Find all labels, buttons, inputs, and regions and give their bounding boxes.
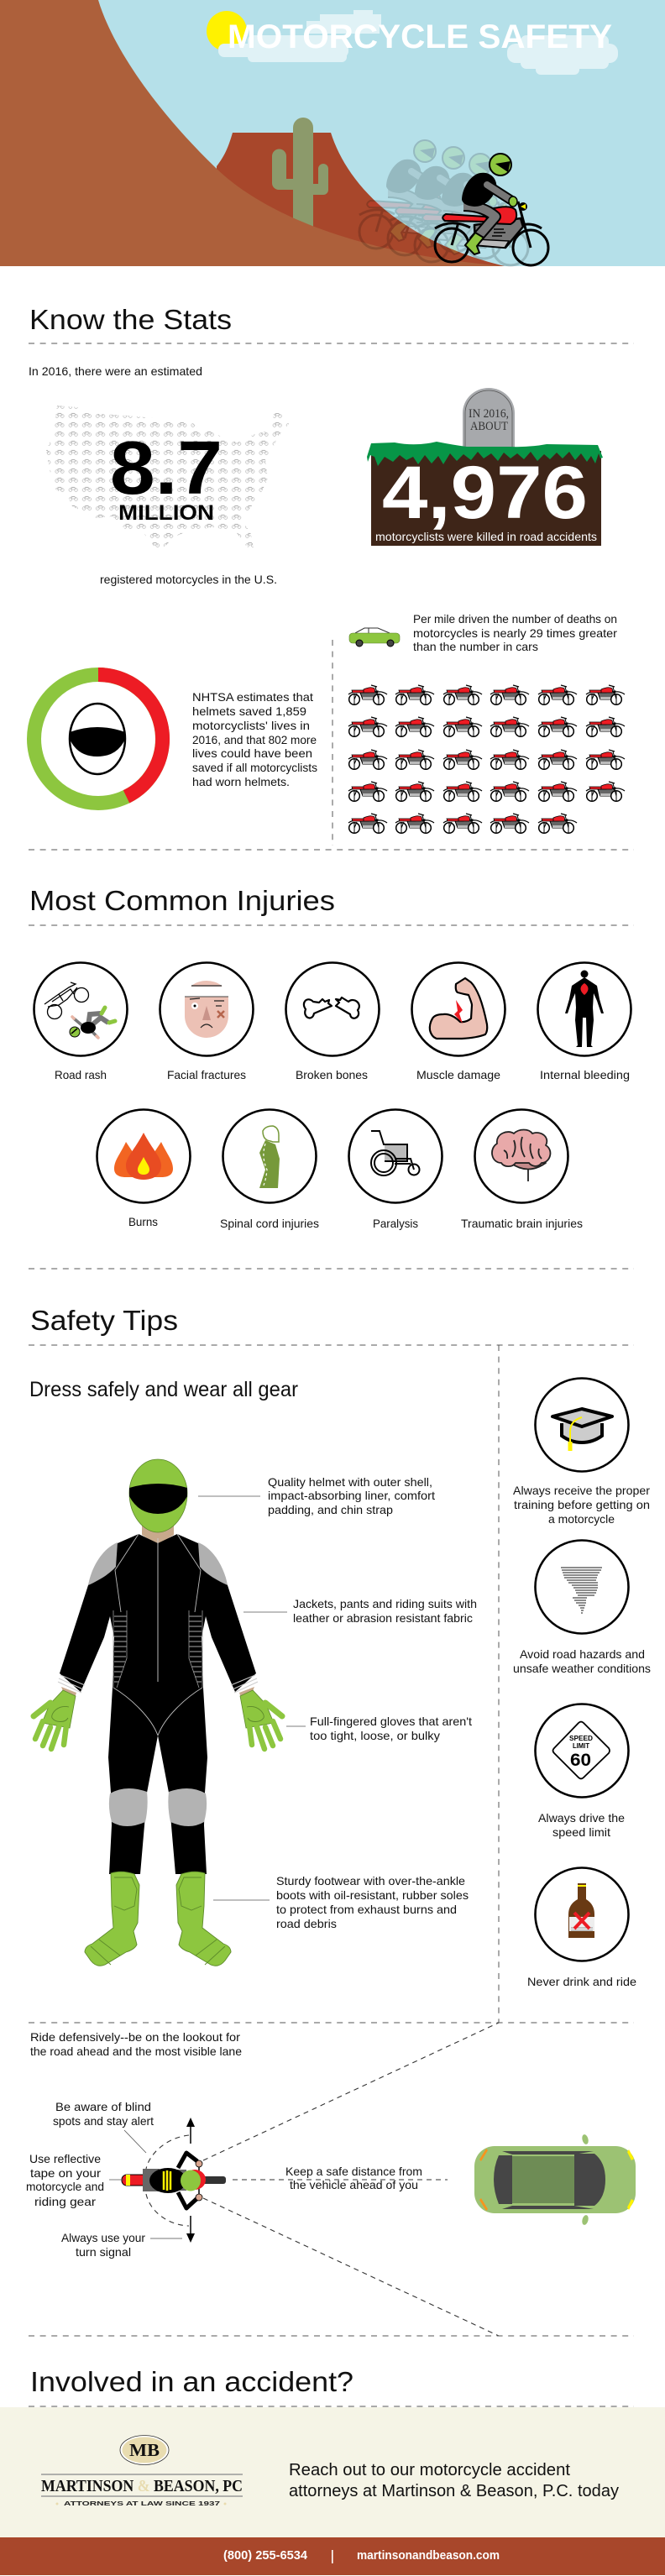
tombstone: IN 2016, (469, 407, 509, 421)
heading: know the stats: Know the Stats (29, 304, 232, 335)
injury: muscle damage (411, 962, 505, 1081)
title: MOTORCYCLE SAFETY (228, 18, 612, 55)
injury: traumatic brain: Traumatic brain injuries (461, 1217, 583, 1230)
icon: speed sign (552, 1721, 610, 1778)
icon: crashed bike (45, 982, 89, 1019)
text: per mile: Per mile driven the number of deaths on (413, 612, 617, 626)
clouds (218, 10, 618, 75)
callout: footwear: road debris (276, 1917, 337, 1930)
tip: road hazards (513, 1540, 651, 1675)
tombstone (463, 388, 515, 449)
injury: facial fractures: Facial fractures (167, 1068, 246, 1081)
icon: speed sign: SPEED (569, 1735, 593, 1742)
icon: body with heart (565, 971, 604, 1047)
callout: safe distance: the vehicle ahead of you (290, 2178, 418, 2191)
caption: registered motorcycles in the U.S. (100, 573, 277, 586)
tip: speed limit: Always drive the (538, 1811, 625, 1825)
text: reach out: attorneys at Martinson & Beason, P.C. today (289, 2482, 619, 2500)
icon: rider from above (122, 2152, 226, 2209)
callout: helmet: impact-absorbing liner, comfort (268, 1489, 435, 1502)
number: 4,976 (382, 450, 588, 534)
injury: broken bones (285, 962, 380, 1081)
panel: law firm contact (0, 2407, 665, 2537)
motorcycle and rider (435, 154, 548, 265)
footer bar (0, 2537, 665, 2575)
tombstone: ABOUT (470, 420, 508, 433)
callout: blind spots: spots and stay alert (53, 2114, 154, 2128)
ghost riders (359, 140, 528, 265)
callout: gloves: Full-fingered gloves that aren't (310, 1715, 472, 1728)
callout: footwear: to protect from exhaust burns and (276, 1903, 457, 1916)
suit, gloves, boots (34, 1534, 282, 1966)
cactus (272, 118, 328, 243)
footer bar: (800) 255-6534 (223, 2548, 308, 2563)
sky (0, 0, 665, 266)
subheading: dress safely: Dress safely and wear all gear (29, 1378, 298, 1401)
icon: broken bone (304, 997, 359, 1018)
icon: wheelchair (371, 1131, 420, 1175)
icon: green car (349, 628, 400, 647)
tip: speed limit (536, 1704, 628, 1839)
stat: us map 8.7 million (46, 406, 289, 586)
tip: speed limit: speed limit (552, 1825, 610, 1839)
text: nhtsa estimate: helmets saved 1,859 (192, 704, 306, 718)
icon: flames (114, 1133, 173, 1180)
icon: graduation cap (552, 1409, 612, 1451)
icon: lightning (454, 1000, 463, 1024)
stat: tombstone 4,976 killed (367, 388, 603, 546)
callout: reflective tape: tape on your (30, 2166, 101, 2180)
tip: training: Always receive the proper (513, 1484, 650, 1497)
injury: broken bones: Broken bones (296, 1068, 368, 1081)
text: reach out (289, 2461, 619, 2500)
caption: motorcyclists were killed in road accidents (375, 530, 597, 543)
icon: crossed bottle (568, 1883, 594, 1938)
callout: helmet (198, 1475, 435, 1516)
logo: ATTORNEYS AT LAW SINCE 1937 (64, 2501, 220, 2507)
callout: turn signal: turn signal (76, 2245, 131, 2259)
injury: paralysis: Paralysis (373, 1217, 418, 1230)
icon: spine figure (259, 1126, 280, 1188)
icon: speed sign: LIMIT (573, 1742, 589, 1750)
text: nhtsa estimate: NHTSA estimates that (192, 690, 313, 704)
logo: MARTINSON & BEASON, PC (41, 2477, 243, 2495)
injury: burns (97, 1110, 190, 1228)
text: nhtsa estimate: 2016, and that 802 more (192, 733, 317, 746)
tip: road hazards: unsafe weather conditions (513, 1662, 651, 1675)
mesa (217, 133, 505, 266)
icon: bandaged face (185, 981, 228, 1038)
injury: spinal cord (220, 1110, 319, 1230)
icon: brain (492, 1130, 550, 1181)
callout: helmet: padding, and chin strap (268, 1503, 393, 1516)
map of motorcycles (46, 406, 289, 552)
tip: never drink: Never drink and ride (527, 1975, 636, 1988)
injury: road rash: Road rash (55, 1068, 107, 1081)
vertical divider (498, 1345, 500, 2023)
callout: footwear (213, 1874, 469, 1930)
text: ride defensively (30, 2030, 242, 2058)
text: ride defensively: the road ahead and the most visible lane (30, 2045, 242, 2058)
footer bar: martinsonandbeason.com (357, 2548, 500, 2563)
callout: blind spots (53, 2100, 154, 2153)
callout: reflective tape: Use reflective (29, 2152, 101, 2165)
callout: turn signal: Always use your (61, 2231, 145, 2244)
callout: footwear: boots with oil-resistant, rubber soles (276, 1888, 469, 1902)
injury: muscle damage: Muscle damage (416, 1068, 500, 1081)
pictogram: 29 motorcycles (348, 685, 625, 833)
soil (371, 451, 601, 546)
vertical divider (332, 640, 333, 846)
icon: tornado (561, 1568, 602, 1613)
icon: fallen rider (70, 1008, 115, 1038)
heading: most common injuries: Most Common Injuries (29, 885, 335, 916)
icon: car from above (474, 2134, 636, 2226)
injury: internal bleeding (537, 962, 631, 1081)
number: 8.7 (110, 427, 223, 510)
callout: jackets: Jackets, pants and riding suits with (293, 1597, 477, 1610)
injury: paralysis (349, 1110, 442, 1230)
callout: blind spots: Be aware of blind (55, 2100, 151, 2113)
text: estimated intro: In 2016, there were an estimated (29, 364, 202, 378)
logo (41, 2435, 243, 2507)
helmet (129, 1459, 187, 1532)
text: nhtsa estimate (192, 690, 317, 788)
callout: reflective tape (26, 2152, 124, 2208)
text: per mile: motorcycles is nearly 29 times greater (413, 626, 617, 640)
icon: speed sign: 60 (570, 1751, 591, 1770)
tip: never drink (527, 1867, 636, 1988)
callout: jackets (243, 1597, 477, 1625)
injury: burns: Burns (128, 1215, 158, 1228)
neck (142, 1524, 174, 1545)
text: nhtsa estimate: lives could have been (192, 746, 312, 760)
callout: helmet: Quality helmet with outer shell, (268, 1475, 432, 1489)
callout: turn signal (61, 2231, 182, 2259)
logo: MB (129, 2440, 160, 2460)
hill (0, 0, 505, 266)
injury: internal bleeding: Internal bleeding (540, 1068, 630, 1081)
tip: road hazards: Avoid road hazards and (520, 1647, 645, 1661)
unit: MILLION (118, 501, 214, 525)
callout: gloves (286, 1715, 472, 1742)
injury: road rash (34, 962, 128, 1081)
tip: training: training before getting on (514, 1498, 650, 1511)
icon: flexed arm (430, 978, 487, 1039)
text: per mile: than the number in cars (413, 640, 538, 653)
callout: footwear: Sturdy footwear with over-the-ankle (276, 1874, 465, 1887)
heading: involved in an accident: Involved in an accident? (30, 2366, 353, 2397)
callout: gloves: too tight, loose, or bulky (310, 1729, 440, 1742)
text: per mile (413, 612, 617, 653)
text: nhtsa estimate: saved if all motorcyclists (192, 761, 317, 774)
heading: safety tips: Safety Tips (30, 1305, 178, 1336)
sight lines (146, 2023, 499, 2336)
hero banner (0, 0, 665, 266)
text: ride defensively: Ride defensively--be on the lookout for (30, 2030, 240, 2044)
callout: safe distance (285, 2165, 422, 2191)
injury: facial fractures (160, 962, 254, 1081)
callout: jackets: leather or abrasion resistant fabric (293, 1611, 473, 1625)
tip: training (513, 1379, 650, 1526)
text: nhtsa estimate: had worn helmets. (192, 775, 290, 788)
text: nhtsa estimate: motorcyclists' lives in (192, 719, 310, 732)
injury: spinal cord: Spinal cord injuries (220, 1217, 319, 1230)
arrows: turn signal (186, 2118, 195, 2243)
grass (367, 442, 603, 466)
figure: rider in full gear (34, 1459, 282, 1966)
tip: training: a motorcycle (548, 1512, 615, 1526)
text: reach out: Reach out to our motorcycle accident (289, 2461, 570, 2479)
callout: reflective tape: riding gear (34, 2195, 96, 2208)
sun (207, 11, 247, 51)
helmet ring chart (34, 675, 163, 803)
icon: helmet (70, 704, 125, 774)
callout: safe distance: Keep a safe distance from (285, 2165, 422, 2178)
injury: traumatic brain (461, 1110, 583, 1230)
callout: reflective tape: motorcycle and (26, 2180, 104, 2193)
